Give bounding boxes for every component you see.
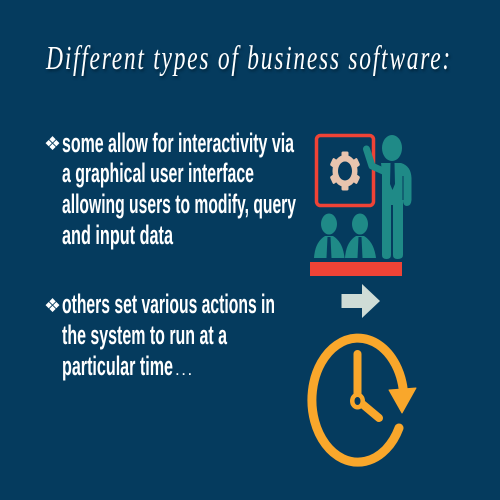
bullet text: scheduled actions: particular time — [62, 351, 173, 381]
clock circular arrow ring — [312, 338, 403, 462]
text block: scheduled software — [44, 289, 275, 381]
arrowhead — [389, 388, 416, 413]
red base bar — [310, 262, 402, 276]
audience member — [314, 214, 344, 258]
bullet text: interactivity — [62, 128, 296, 250]
audience member — [345, 214, 376, 258]
bullet text: interactivity: a graphical user interface — [62, 158, 254, 188]
bullet: diamond: ❖ — [44, 133, 61, 155]
text block: interactive software — [44, 128, 296, 250]
presenter figure — [366, 135, 412, 259]
bullet text: interactivity: allowing users to modify, query — [62, 189, 296, 219]
icon: presenter with audience — [310, 135, 412, 276]
bullet text: scheduled actions: ... — [175, 360, 194, 379]
bullet text: interactivity: some allow for interactivity via — [62, 128, 295, 158]
icon: clock — [312, 338, 416, 462]
bullet text: scheduled actions — [62, 289, 275, 381]
arrow — [342, 284, 380, 318]
presentation screen — [316, 136, 374, 206]
bullet text: scheduled actions: the system to run at a — [62, 320, 228, 350]
bullet text: scheduled actions: others set various actions in — [62, 289, 275, 319]
icon: gear — [330, 152, 360, 190]
clock hands — [350, 354, 379, 418]
bullet text: interactivity: and input data — [62, 220, 174, 250]
bullet: diamond: ❖ — [44, 295, 61, 317]
